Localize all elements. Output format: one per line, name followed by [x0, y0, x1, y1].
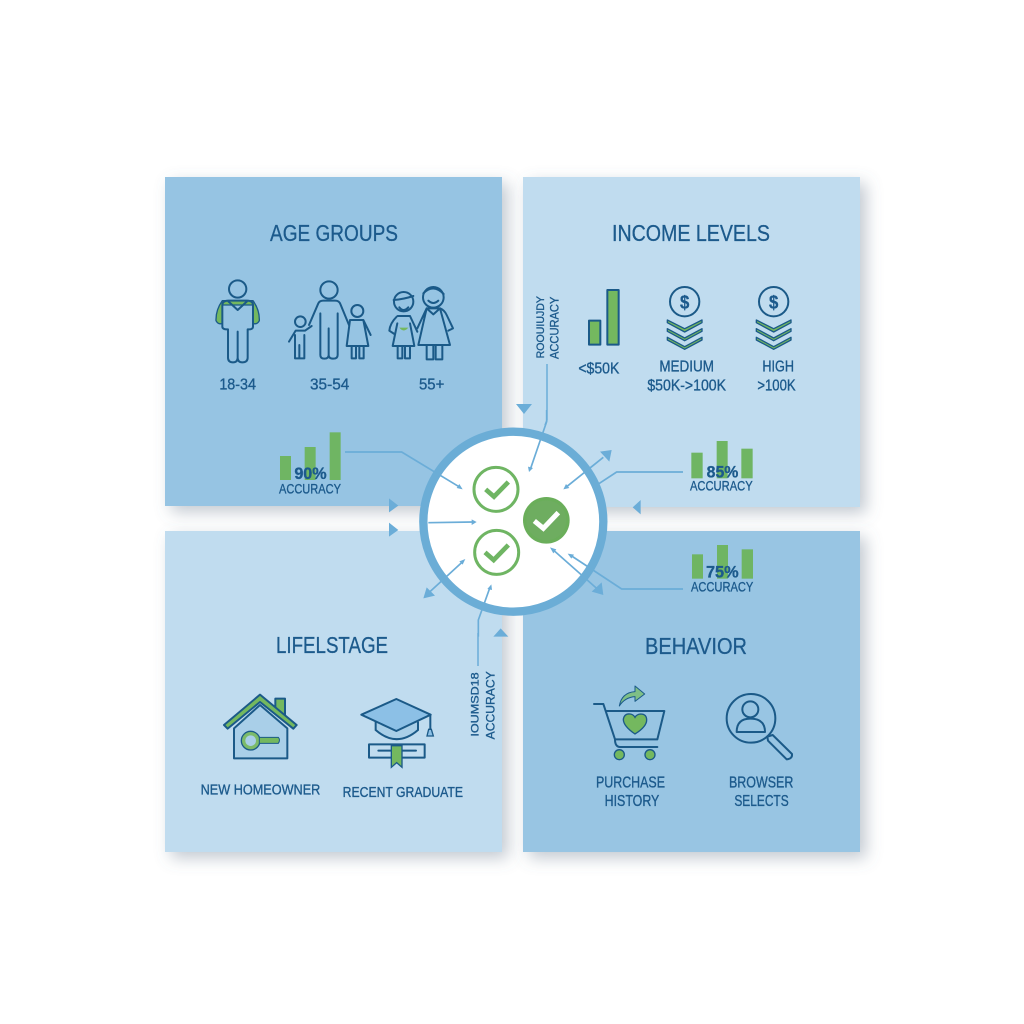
chart: 85% accuracy	[690, 441, 753, 494]
label: medium income: MEDIUM	[659, 359, 714, 376]
lifestage icons and labels	[201, 671, 498, 801]
icon: shopping cart with heart	[594, 686, 664, 760]
chart: 75% accuracy: 75%	[706, 563, 739, 582]
label: 18-34: 18-34	[219, 377, 256, 394]
icon: medium income coin	[667, 287, 702, 349]
icon: house with key	[224, 695, 297, 758]
icon: graduation cap and diploma	[361, 699, 433, 767]
label: purchase history	[596, 775, 665, 810]
check badge: filled	[523, 497, 570, 544]
chart: 85% accuracy: ACCURACY	[690, 479, 753, 494]
panel: behavior	[523, 531, 860, 852]
check badge: top	[474, 467, 518, 511]
panel: lifestage	[165, 531, 502, 852]
chart: 85% accuracy: 85%	[707, 462, 739, 481]
chart: 90% accuracy: ACCURACY	[279, 481, 341, 496]
label: high income	[757, 359, 796, 395]
heading: lifestage: LIFELSTAGE	[276, 632, 388, 658]
label: medium income	[647, 359, 727, 395]
label: high income: HIGH	[762, 359, 794, 376]
heading: income levels: INCOME LEVELS	[612, 220, 770, 246]
rotated accuracy note	[535, 295, 562, 359]
panel: age groups	[165, 177, 502, 506]
icon: low income bars	[589, 290, 619, 345]
label: high income: >100K	[757, 378, 796, 395]
label: recent graduate: RECENT GRADUATE	[343, 785, 463, 801]
label: 55+: 55+	[419, 377, 444, 394]
label: medium income: $50K->100K	[647, 378, 727, 395]
behavior icons and labels	[594, 545, 793, 810]
chart: 90% accuracy: 90%	[294, 464, 327, 483]
pointer triangles	[389, 404, 641, 637]
label: new homeowner: NEW HOMEOWNER	[201, 782, 320, 798]
income icons and labels	[535, 287, 796, 494]
panel: income levels	[523, 177, 860, 507]
label: purchase history: HISTORY	[605, 793, 659, 810]
age icons and labels	[216, 280, 453, 496]
icon: high income coin: $	[769, 291, 779, 312]
label: low income: <$50K	[578, 360, 620, 377]
rotated accuracy note: ACCURACY	[484, 671, 498, 739]
connector: lower note	[477, 633, 479, 666]
icon: magnifier over person	[727, 694, 792, 759]
rotated accuracy note: ACCURACY	[548, 297, 562, 359]
label: 35-54: 35-54	[310, 377, 350, 394]
rotated accuracy note: IOUMSD18	[470, 672, 482, 737]
chart: 75% accuracy: ACCURACY	[691, 579, 753, 594]
hub disc	[423, 432, 603, 612]
chart: 90% accuracy	[279, 432, 341, 496]
chart: 75% accuracy	[691, 545, 753, 594]
icon: parent with two children	[289, 281, 371, 359]
check badge: bottom	[475, 530, 519, 574]
icon: medium income coin: $	[680, 291, 690, 312]
label: browser selects	[729, 775, 793, 810]
icon: high income coin	[756, 287, 791, 349]
connector arrows	[345, 410, 683, 637]
central hub	[345, 404, 683, 637]
icon: young adult with backpack	[216, 280, 259, 362]
label: browser selects: SELECTS	[734, 793, 789, 810]
rotated accuracy note	[470, 671, 498, 739]
connector: upper note	[545, 364, 547, 425]
label: purchase history: PURCHASE	[596, 775, 665, 792]
rotated accuracy note: ROOUIUJDY	[535, 295, 547, 358]
icon: older couple	[389, 287, 453, 359]
heading: age groups: AGE GROUPS	[270, 220, 398, 246]
label: browser selects: BROWSER	[729, 775, 793, 792]
hub ring	[423, 432, 603, 612]
heading: behavior: BEHAVIOR	[645, 633, 747, 659]
